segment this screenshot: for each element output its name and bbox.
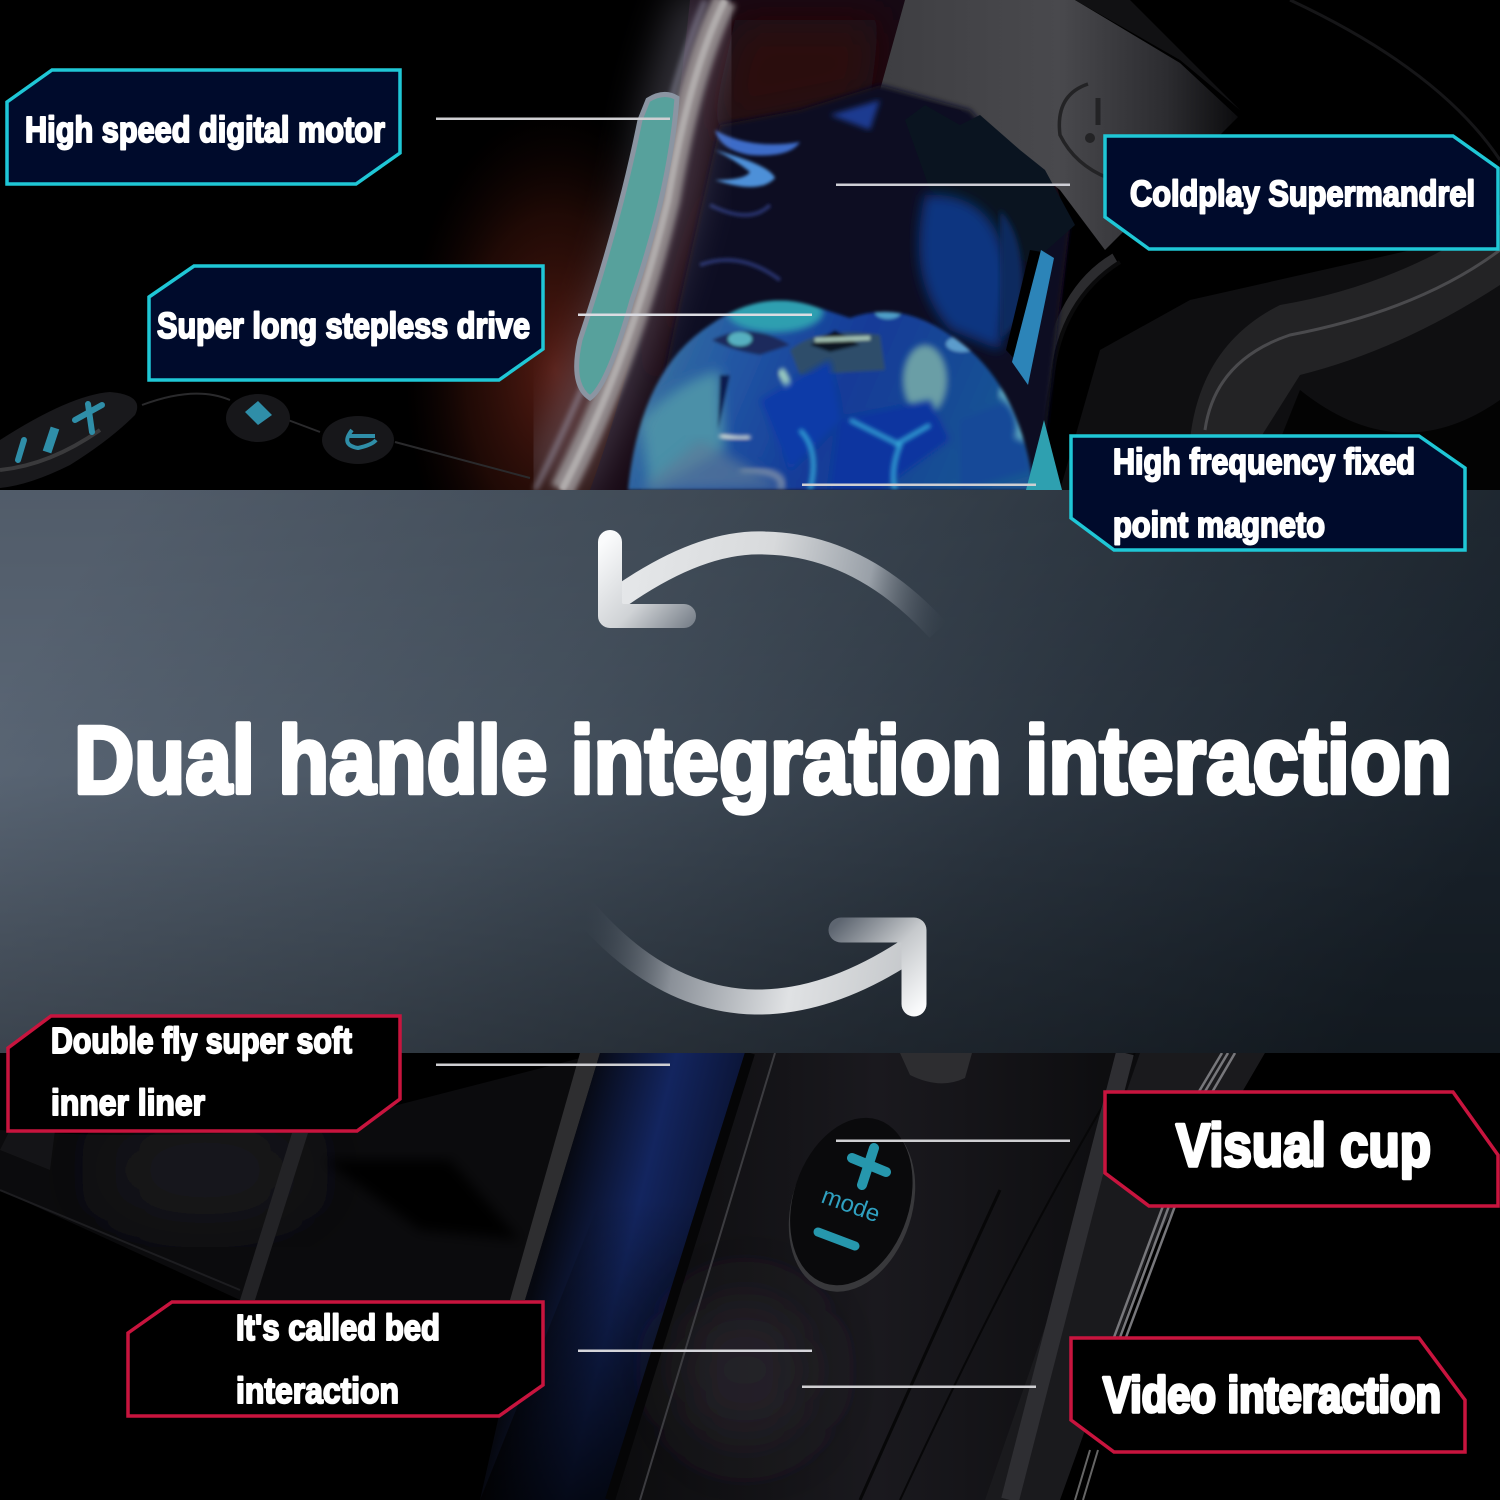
leader line: [578, 314, 812, 316]
leader line: [802, 484, 1036, 486]
callout: Video interaction: [1071, 1338, 1465, 1452]
mode button: [788, 1118, 916, 1292]
blue side fin: [1006, 250, 1040, 358]
callout: Super long stepless drive: Super long stepless drive: [157, 305, 530, 346]
leader line: [836, 184, 1070, 186]
callout: Coldplay Supermandrel: [1105, 136, 1498, 249]
callout: High speed digital motor: High speed digital motor: [25, 109, 385, 150]
callout: Visual cup: [1105, 1092, 1498, 1206]
callout: Double fly super soft inner liner: Double fly super soft: [51, 1020, 352, 1061]
flame marks: [715, 130, 800, 155]
icon: rotate arrow bottom: [582, 908, 914, 1004]
leader line: [578, 1350, 812, 1352]
leader line: [436, 1064, 670, 1066]
leader line: [436, 118, 670, 120]
blue ball: [628, 292, 1034, 490]
callout: High speed digital motor: [7, 70, 400, 184]
handle rim with glow: [550, 0, 715, 490]
callout: Visual cup: Visual cup: [1176, 1112, 1431, 1179]
blue strip: [480, 1053, 750, 1500]
product photo: top device close-up: [0, 0, 1500, 490]
callout: Double fly super soft inner liner: [8, 1016, 400, 1131]
callout: High frequency fixed point magneto: [1071, 436, 1465, 550]
product photo: bottom device close-up: [0, 1053, 1265, 1500]
grey cup shell: [880, 0, 1238, 250]
callout: Double fly super soft inner liner: inner liner: [51, 1082, 205, 1123]
callout: High frequency fixed point magneto: High frequency fixed: [1113, 441, 1415, 482]
callout: Video interaction: Video interaction: [1103, 1367, 1441, 1423]
callout: It's called bed interaction: [128, 1302, 543, 1416]
central band background: [0, 490, 1500, 1053]
callout: Super long stepless drive: [149, 266, 543, 380]
leader line: [836, 1140, 1070, 1142]
product photo: bottom device close-up: mode: [818, 1182, 884, 1228]
blue figure: dark upper mass: [640, 85, 1070, 490]
teal strip: [577, 94, 677, 398]
callout: High frequency fixed point magneto: point magneto: [1113, 504, 1325, 545]
callout: It's called bed interaction: It's called bed: [236, 1307, 440, 1348]
callout: It's called bed interaction: interaction: [236, 1370, 399, 1411]
grey stripe beside blue: [510, 1053, 600, 1300]
leather strap: [1060, 230, 1500, 490]
leader line: [802, 1386, 1036, 1388]
remote controls: [0, 392, 530, 488]
handle body: [615, 1053, 1140, 1500]
icon: rotate arrow top: [610, 542, 938, 630]
